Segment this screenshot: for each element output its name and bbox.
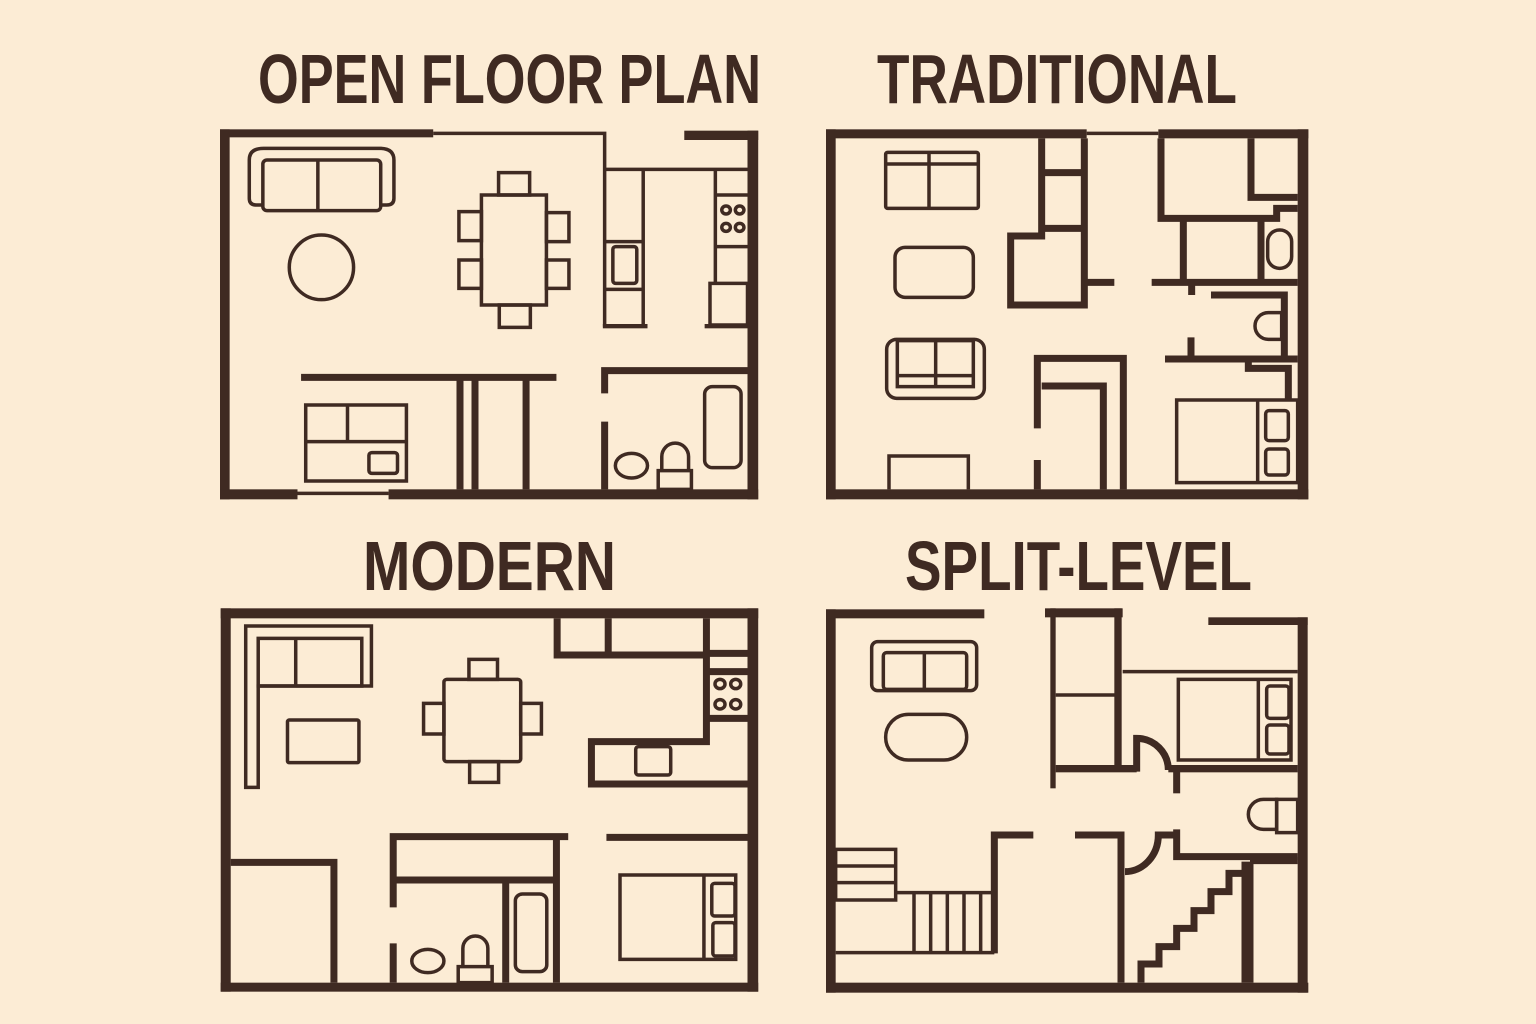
- bedroom lower: [1177, 362, 1298, 483]
- hallway walls: [301, 377, 556, 489]
- desk: [306, 405, 406, 481]
- toilet: [1248, 799, 1298, 833]
- toilet: [1165, 295, 1298, 359]
- closets: [1011, 138, 1084, 305]
- bed: [620, 875, 736, 959]
- dining table: [424, 659, 541, 782]
- coffee table: [287, 720, 359, 763]
- bathroom: [393, 837, 568, 983]
- title: modern: MODERN: [363, 527, 616, 605]
- panel: modern: [221, 608, 758, 992]
- door swing upper: [1137, 738, 1168, 772]
- bathroom: [605, 371, 747, 489]
- panel: split-level: [826, 608, 1308, 993]
- bed: [1178, 679, 1291, 760]
- left room: [231, 862, 334, 983]
- bedroom upper: [1161, 138, 1298, 279]
- cabinet: [889, 456, 968, 489]
- middle walls: [994, 835, 1121, 983]
- sofa: [886, 152, 978, 208]
- kitchen: [557, 618, 747, 784]
- middle rooms: [1037, 358, 1123, 489]
- closet: [1045, 608, 1137, 788]
- staircase right: [1141, 873, 1245, 983]
- sofa: [249, 148, 394, 211]
- door swing lower: [1125, 829, 1298, 872]
- title: split-level: SPLIT-LEVEL: [905, 527, 1252, 605]
- sofa: [872, 642, 977, 691]
- oval coffee table: [886, 714, 967, 760]
- staircase left: [836, 849, 994, 953]
- title: traditional: TRADITIONAL: [877, 40, 1237, 118]
- panel: open floor plan: [220, 129, 758, 499]
- round rug: [289, 235, 354, 300]
- dining table: [459, 173, 569, 327]
- panel: traditional: [826, 129, 1308, 499]
- loveseat: [887, 339, 984, 398]
- kitchen: [603, 169, 747, 328]
- title: open floor plan: OPEN FLOOR PLAN: [258, 40, 761, 118]
- ottoman: [895, 247, 973, 297]
- sectional sofa: [246, 626, 371, 787]
